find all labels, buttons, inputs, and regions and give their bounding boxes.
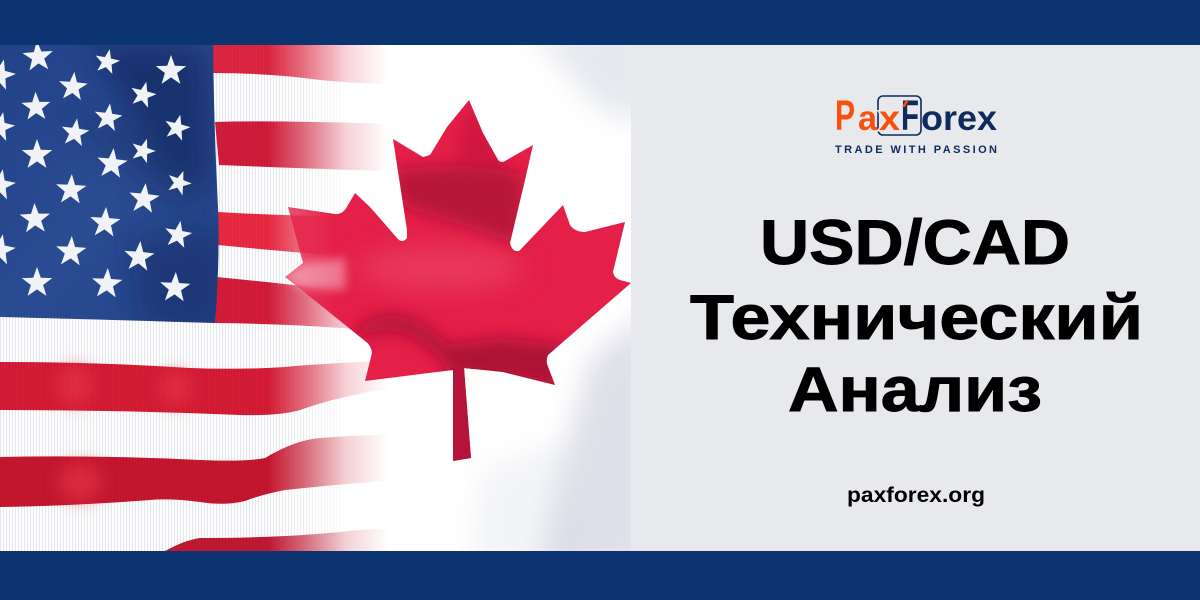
website: paxforex.org: [847, 484, 985, 507]
logo: x: [879, 99, 901, 138]
logo: F: [901, 92, 919, 140]
stars: [0, 40, 195, 302]
heading: [690, 208, 1143, 425]
stripe shading: [57, 365, 191, 502]
logo: [835, 92, 998, 156]
panel: right side: [631, 45, 1200, 551]
logo: orex: [921, 99, 998, 138]
heading: Анализ: [788, 355, 1042, 425]
logo wordmark: P: [835, 92, 855, 140]
heading: USD/CAD: [760, 208, 1070, 278]
Canadian flag fabric shading: [480, 45, 631, 551]
top band: [0, 0, 1200, 45]
logo tagline: TRADE WITH PASSION: [835, 144, 997, 156]
heading: Технический: [690, 283, 1143, 353]
leaf shadows: [355, 100, 565, 463]
canton shadows: [63, 45, 218, 323]
maple leaf: [285, 100, 631, 463]
logo: a: [858, 99, 878, 138]
fabric weave on US stripes: [0, 45, 340, 551]
bottom band: [0, 551, 1200, 600]
logo frame: [878, 96, 921, 135]
US flag stripes: [0, 45, 420, 551]
blurred band over leaf: [285, 258, 345, 290]
leaf highlight: [355, 246, 525, 290]
leaf stem shade: [450, 368, 474, 463]
fade from US flag to Canadian flag: [268, 45, 388, 551]
panel: flags photo: [0, 45, 631, 551]
US flag canton: [0, 40, 225, 330]
